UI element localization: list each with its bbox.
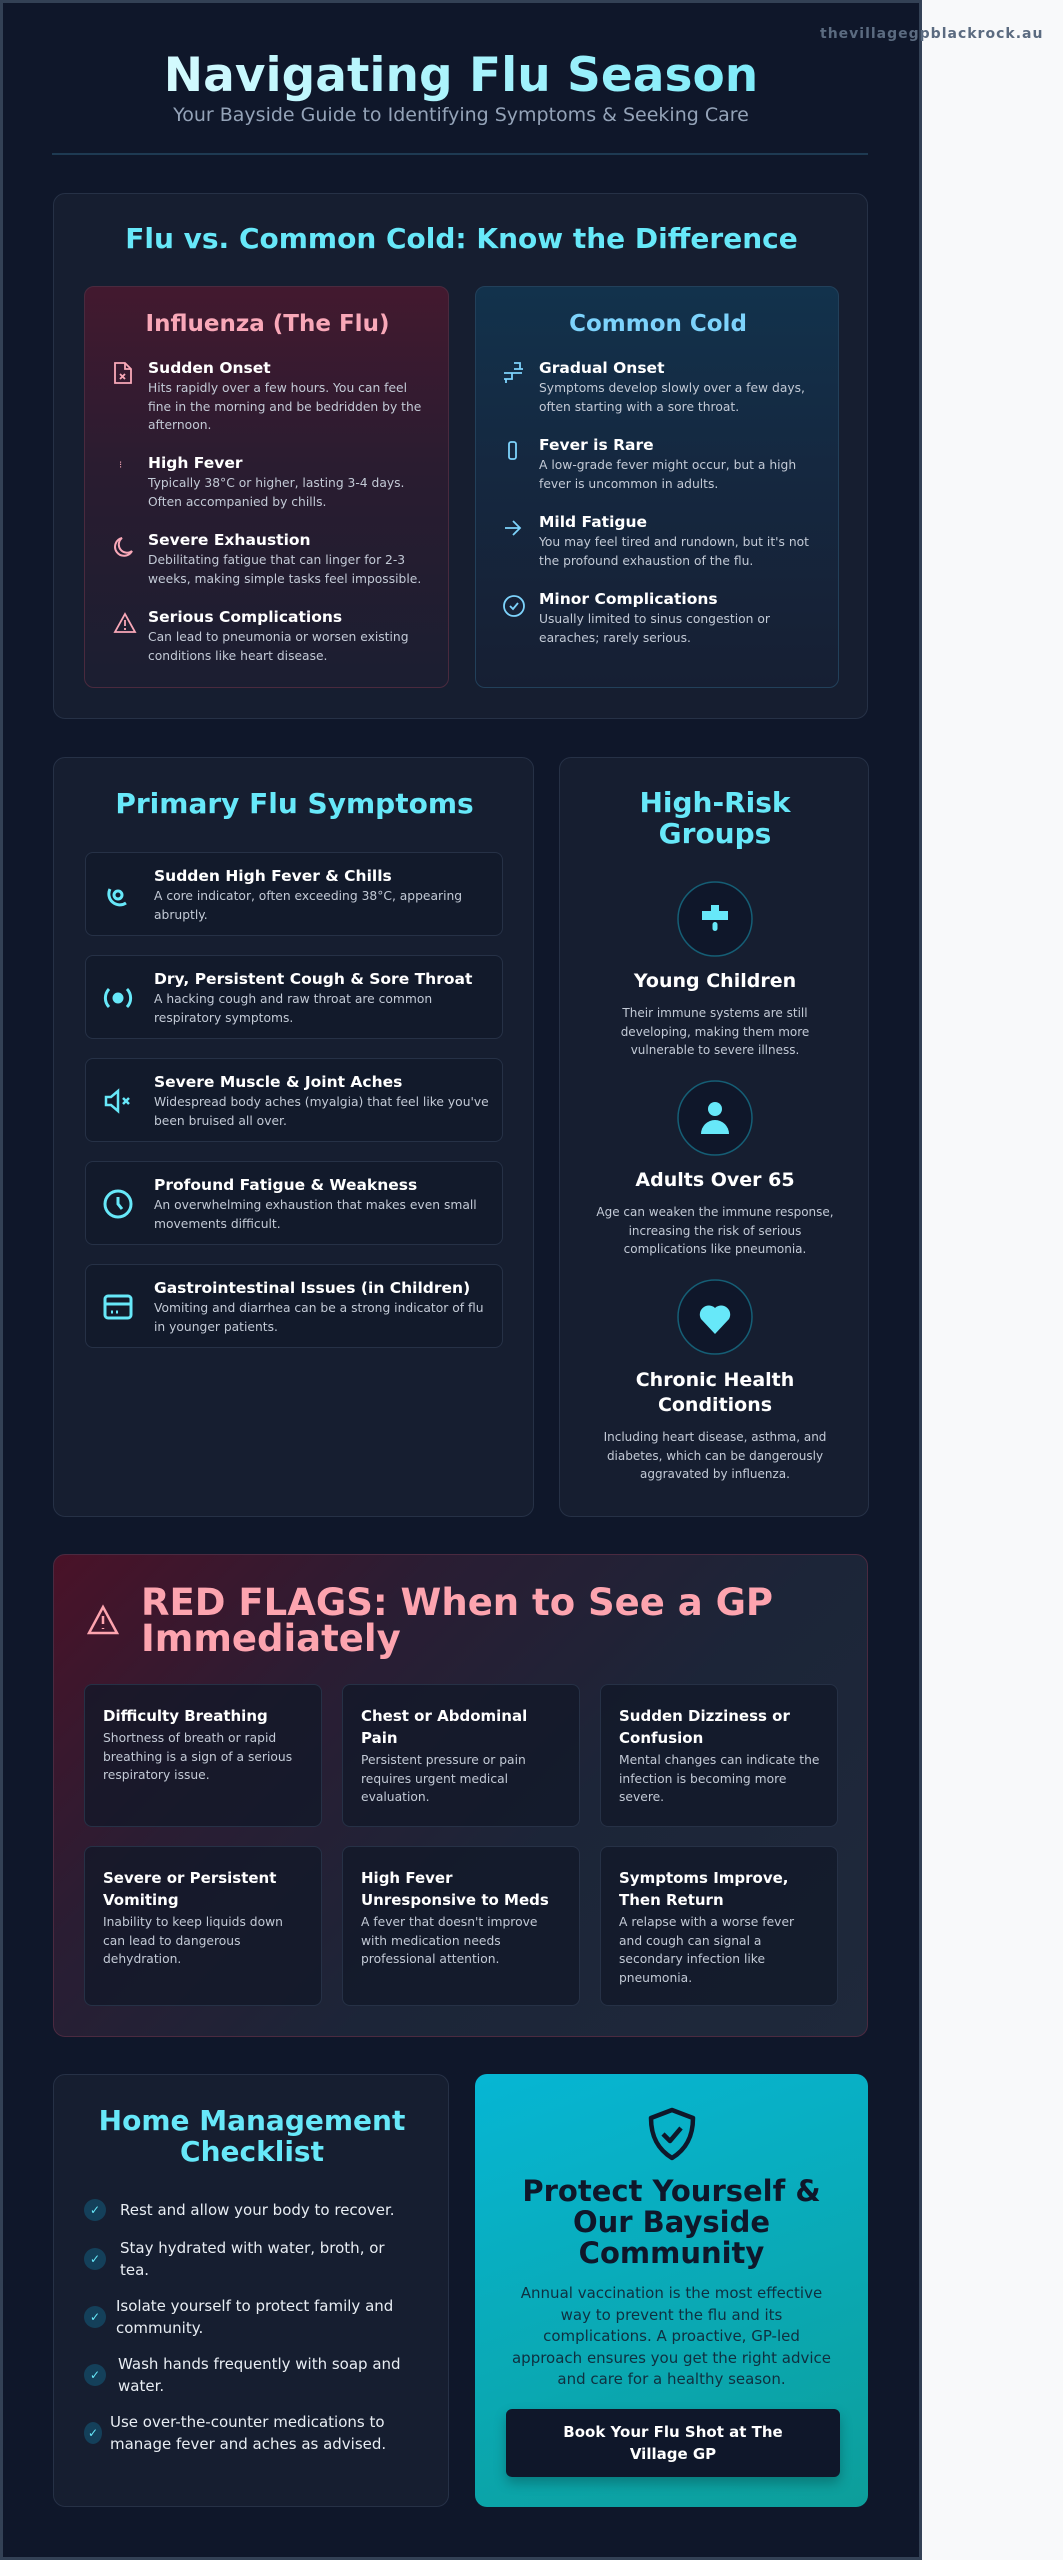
group: young children: vulnerable to severe illness.	[631, 1043, 799, 1057]
symptom: cough	[85, 955, 503, 1039]
flag: dizziness: Sudden Dizziness or	[619, 1707, 790, 1725]
group: adults over 65: Age can weaken the immune response,	[596, 1205, 834, 1219]
symptom: fever: A core indicator, often exceeding 38°C, appearing	[154, 889, 462, 903]
check item 4	[84, 2355, 401, 2395]
check item 3: Isolate yourself to protect family and	[116, 2297, 393, 2315]
heading: influenza: Influenza (The Flu)	[146, 311, 389, 337]
symptom: fever: abruptly.	[154, 908, 208, 922]
grid: red flag cards	[84, 1684, 838, 2006]
text: vaccination: approach ensures you get the right advice	[512, 2348, 831, 2366]
item: mild fatigue	[505, 513, 809, 568]
item: fever rare: A low-grade fever might occur, but a high	[539, 458, 796, 472]
item: complications: Can lead to pneumonia or worsen existing	[148, 630, 409, 644]
flag: relapse: A relapse with a worse fever	[619, 1915, 794, 1929]
item: gradual onset: Gradual Onset	[539, 359, 664, 377]
icon: moon	[114, 537, 133, 557]
item: sudden onset: Hits rapidly over a few hours. You can feel	[148, 381, 407, 395]
item: mild fatigue: You may feel tired and rundown, but it's not	[539, 535, 809, 549]
item: exhaustion: Severe Exhaustion	[148, 531, 311, 549]
panel: protect community	[475, 2074, 868, 2507]
item: sudden onset: Sudden Onset	[148, 359, 271, 377]
heading: red flags: RED FLAGS: When to See a GP	[141, 1581, 773, 1624]
symptom: cough: respiratory symptoms.	[154, 1010, 293, 1024]
symptom: cough: Dry, Persistent Cough & Sore Throat	[154, 970, 472, 988]
flag: breathing: Difficulty Breathing	[103, 1707, 268, 1725]
check item 5: Use over-the-counter medications to	[110, 2413, 385, 2431]
flag: high fever: with medication needs	[361, 1934, 501, 1948]
group: chronic conditions: aggravated by influenza.	[640, 1467, 790, 1481]
group: young children: Their immune systems are still	[622, 1006, 808, 1020]
heading: home management: Home Management	[99, 2104, 405, 2137]
panel: influenza	[84, 286, 449, 688]
item: exhaustion: weeks, making simple tasks feel impossible.	[148, 572, 421, 586]
symptom: fatigue: An overwhelming exhaustion that makes even small	[154, 1198, 477, 1212]
heading: high-risk: Groups	[659, 817, 771, 850]
symptom: aches	[85, 1058, 503, 1142]
flag: high fever: Unresponsive to Meds	[361, 1891, 549, 1909]
icon: dots: ⁝	[119, 460, 122, 471]
flag: vomiting	[84, 1846, 322, 2006]
group: adults over 65: complications like pneumonia.	[624, 1242, 806, 1256]
group: chronic conditions	[604, 1279, 826, 1481]
check item 3: community.	[116, 2319, 203, 2337]
group: young children	[621, 881, 809, 1057]
icon: broadcast	[104, 988, 132, 1008]
symptom: fatigue: Profound Fatigue & Weakness	[154, 1176, 417, 1194]
heading: primary symptoms: Primary Flu Symptoms	[115, 787, 474, 820]
group: young children: Young Children	[634, 970, 796, 992]
heading: protect	[522, 2174, 821, 2270]
group: young children: developing, making them more	[621, 1024, 809, 1038]
icon: thermometer	[508, 441, 517, 460]
text: vaccination	[512, 2284, 831, 2388]
group: chronic conditions: Chronic Health	[636, 1369, 794, 1391]
icon: heart	[677, 1279, 753, 1355]
symptom: GI: Vomiting and diarrhea can be a strong indicator of flu	[154, 1301, 484, 1315]
flag: relapse: Then Return	[619, 1891, 724, 1909]
flag: chest pain: evaluation.	[361, 1790, 430, 1804]
check item 2: Stay hydrated with water, broth, or	[120, 2239, 385, 2257]
text: vaccination: Annual vaccination is the most effective	[521, 2284, 822, 2302]
icon: fever	[107, 888, 127, 906]
symptom: GI	[85, 1264, 503, 1348]
panel: flu vs cold	[53, 193, 868, 719]
heading: home management: Checklist	[180, 2135, 324, 2168]
group: adults over 65: increasing the risk of serious	[629, 1224, 801, 1238]
icon: warning	[87, 1604, 119, 1634]
text: vaccination: and care for a healthy season.	[557, 2370, 786, 2388]
item: sudden onset	[114, 359, 421, 432]
watermark: thevillagegpblackrock.au	[820, 26, 1043, 42]
heading: high-risk	[639, 786, 791, 850]
flag: dizziness: Mental changes can indicate the	[619, 1753, 819, 1767]
flag: chest pain: Pain	[361, 1729, 398, 1747]
group: chronic conditions: diabetes, which can be dangerously	[607, 1448, 823, 1462]
text: vaccination: way to prevent the flu and its	[561, 2306, 782, 2324]
check item 1: Rest and allow your body to recover.	[120, 2201, 395, 2219]
button: book: Book Your Flu Shot at The	[563, 2423, 783, 2441]
flag: vomiting: Inability to keep liquids down	[103, 1915, 283, 1929]
check item 5: ✓	[88, 2426, 98, 2440]
flag: chest pain	[342, 1684, 580, 1827]
icon: speaker mute	[104, 1088, 130, 1114]
check item 1: ✓	[90, 2203, 100, 2217]
icon: arrows	[504, 362, 523, 383]
check item 2: tea.	[120, 2261, 149, 2279]
item: minor complications: Minor Complications	[539, 590, 718, 608]
icon: clock	[104, 1190, 132, 1218]
symptom: aches: Widespread body aches (myalgia) that feel like you've	[154, 1095, 489, 1109]
item: complications	[114, 608, 409, 662]
flag: high fever: A fever that doesn't improve	[361, 1915, 537, 1929]
flag: high fever: professional attention.	[361, 1952, 499, 1966]
flag: high fever: High Fever	[361, 1869, 452, 1887]
flag: chest pain: requires urgent medical	[361, 1772, 508, 1786]
flag: vomiting: dehydration.	[103, 1952, 181, 1966]
heading: common cold: Common Cold	[569, 311, 747, 337]
check item 5: manage fever and aches as advised.	[110, 2435, 386, 2453]
check item 4: Wash hands frequently with soap and	[118, 2355, 401, 2373]
icon: check circle	[503, 595, 525, 617]
panel: common cold	[475, 286, 839, 688]
heading: home management	[99, 2104, 405, 2168]
symptom: GI: Gastrointestinal Issues (in Children)	[154, 1279, 470, 1297]
icon: person	[677, 1080, 753, 1156]
flag: dizziness: infection is becoming more	[619, 1772, 786, 1786]
icon: warning	[114, 612, 136, 633]
heading: red flags	[141, 1581, 773, 1660]
panel: primary flu symptoms	[53, 757, 534, 1517]
item: sudden onset: fine in the morning and be bedridden by the	[148, 400, 421, 414]
symptom: cough: A hacking cough and raw throat are common	[154, 992, 432, 1006]
item: high fever	[119, 454, 404, 508]
item: gradual onset: often starting with a sore throat.	[539, 400, 739, 414]
item: high fever: High Fever	[148, 454, 243, 472]
check item 4: ✓	[90, 2368, 100, 2382]
item: complications: Serious Complications	[148, 608, 342, 626]
heading: protect: Community	[579, 2236, 764, 2270]
flag: relapse: pneumonia.	[619, 1970, 692, 1984]
flag: dizziness: Confusion	[619, 1729, 703, 1747]
flag: high fever	[342, 1846, 580, 2006]
check item 2	[84, 2239, 385, 2279]
flag: relapse	[600, 1846, 838, 2006]
item: minor complications: earaches; rarely serious.	[539, 630, 691, 644]
symptom: aches: been bruised all over.	[154, 1114, 287, 1128]
icon: card	[104, 1294, 132, 1320]
flag: chest pain: Chest or Abdominal	[361, 1707, 527, 1725]
item: mild fatigue: Mild Fatigue	[539, 513, 647, 531]
item: exhaustion	[114, 531, 421, 586]
flag: dizziness	[600, 1684, 838, 1827]
heading: red flags: Immediately	[141, 1617, 401, 1660]
item: sudden onset: afternoon.	[148, 418, 211, 432]
check item 4: water.	[118, 2377, 164, 2395]
group: adults over 65: Adults Over 65	[635, 1169, 795, 1191]
flag: breathing: respiratory issue.	[103, 1768, 210, 1782]
item: minor complications: Usually limited to sinus congestion or	[539, 612, 770, 626]
icon: shield	[648, 2108, 696, 2160]
flag: relapse: and cough can signal a	[619, 1934, 761, 1948]
symptom: fever	[85, 852, 503, 936]
heading: protect: Protect Yourself &	[522, 2174, 821, 2208]
check item 2: ✓	[90, 2252, 100, 2266]
heading: high-risk: High-Risk	[639, 786, 791, 819]
item: mild fatigue: the profound exhaustion of the flu.	[539, 554, 753, 568]
button: book	[506, 2409, 840, 2477]
icon: file x	[114, 362, 132, 384]
item: fever rare: Fever is Rare	[539, 436, 654, 454]
subtitle: Your Bayside Guide to Identifying Symptoms & Seeking Care	[173, 104, 749, 126]
symptom: fatigue: movements difficult.	[154, 1216, 281, 1230]
button: book: Village GP	[630, 2445, 716, 2463]
flag: relapse: secondary infection like	[619, 1952, 765, 1966]
item: high fever: Often accompanied by chills.	[148, 494, 326, 508]
flag: vomiting: can lead to dangerous	[103, 1934, 240, 1948]
icon: arrow	[505, 520, 522, 536]
flag: relapse: Symptoms Improve,	[619, 1869, 789, 1887]
item: gradual onset: Symptoms develop slowly over a few days,	[539, 381, 805, 395]
panel: high-risk groups	[559, 757, 869, 1517]
item: high fever: Typically 38°C or higher, lasting 3-4 days.	[148, 476, 404, 490]
title	[0, 45, 922, 107]
symptom: fever: Sudden High Fever & Chills	[154, 867, 392, 885]
flag: dizziness: severe.	[619, 1790, 664, 1804]
flag: breathing: Shortness of breath or rapid	[103, 1731, 276, 1745]
icon: child	[677, 881, 753, 957]
checklist	[84, 2199, 401, 2453]
flag: chest pain: Persistent pressure or pain	[361, 1753, 526, 1767]
flag: vomiting: Severe or Persistent	[103, 1869, 276, 1887]
item: fever rare: fever is uncommon in adults.	[539, 476, 718, 490]
symptom: aches: Severe Muscle & Joint Aches	[154, 1073, 402, 1091]
item: gradual onset	[504, 359, 805, 414]
group: adults over 65	[596, 1080, 834, 1256]
heading: flu vs cold: Flu vs. Common Cold: Know the Difference	[125, 222, 798, 255]
flag: breathing: breathing is a sign of a serious	[103, 1750, 292, 1764]
group: chronic conditions: Including heart disease, asthma, and	[604, 1430, 826, 1444]
text: vaccination: complications. A proactive, GP-led	[543, 2327, 800, 2345]
symptom: GI: in younger patients.	[154, 1320, 278, 1334]
flag: vomiting: Vomiting	[103, 1891, 179, 1909]
check item 3	[84, 2297, 393, 2337]
item: fever rare	[508, 436, 796, 490]
check item 3: ✓	[90, 2310, 100, 2324]
panel: red flags	[53, 1554, 868, 2037]
group: chronic conditions: Conditions	[658, 1394, 772, 1416]
symptom: fatigue	[85, 1161, 503, 1245]
heading: protect: Our Bayside	[573, 2205, 770, 2239]
item: complications: conditions like heart disease.	[148, 648, 327, 662]
item: minor complications	[503, 590, 770, 644]
flag: breathing	[84, 1684, 322, 1827]
item: exhaustion: Debilitating fatigue that can linger for 2-3	[148, 553, 405, 567]
check item 5	[84, 2413, 386, 2453]
panel: home management	[53, 2074, 449, 2507]
